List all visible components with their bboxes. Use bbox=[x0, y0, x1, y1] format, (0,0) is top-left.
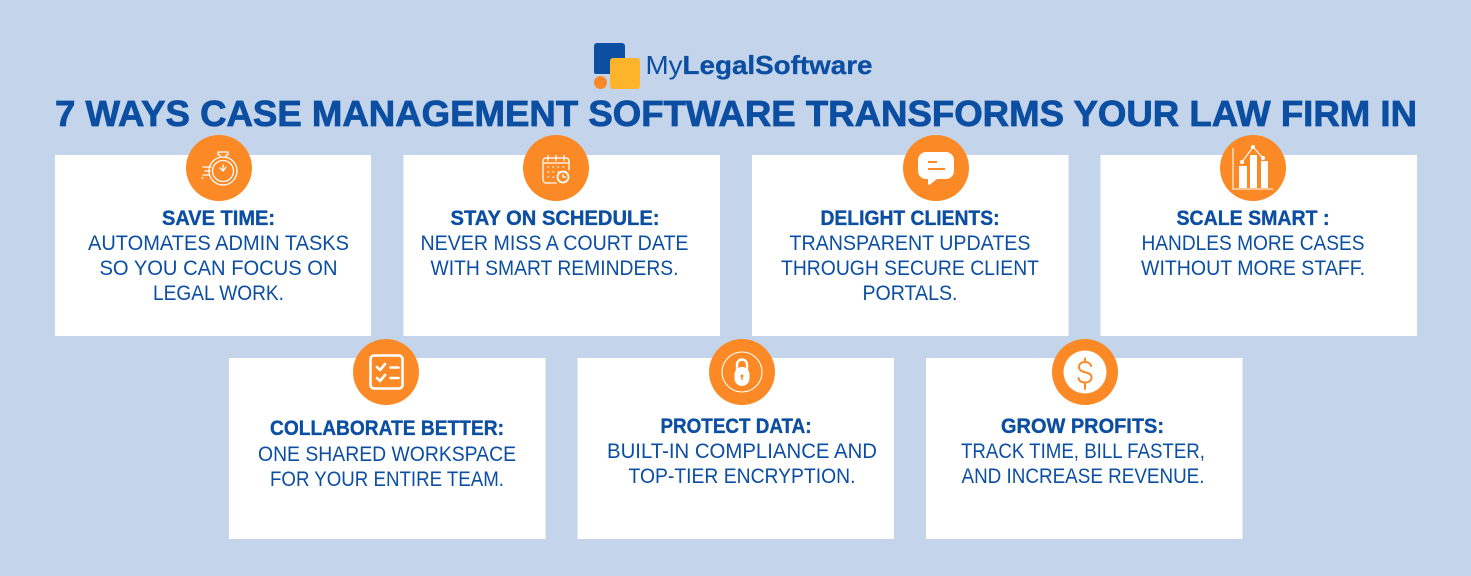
icon: stopwatch bbox=[186, 135, 252, 201]
body text bbox=[258, 443, 516, 491]
heading: PROTECT DATA: bbox=[660, 415, 812, 438]
body text: SO YOU CAN FOCUS ON bbox=[100, 257, 338, 280]
body text: WITHOUT MORE STAFF. bbox=[1141, 257, 1365, 280]
body text bbox=[420, 232, 688, 280]
heading: COLLABORATE BETTER: bbox=[270, 417, 504, 440]
icon: bar chart bbox=[1220, 135, 1286, 201]
heading: GROW PROFITS: bbox=[1001, 415, 1164, 438]
body text: AND INCREASE REVENUE. bbox=[962, 465, 1204, 488]
body text: THROUGH SECURE CLIENT bbox=[781, 257, 1039, 280]
panel: grow profits bbox=[926, 339, 1242, 539]
icon: padlock bbox=[709, 339, 775, 405]
body text bbox=[961, 440, 1205, 488]
logo: MyLegalSoftware bbox=[646, 50, 872, 80]
panel: collaborate better bbox=[229, 339, 546, 539]
heading: SCALE SMART : bbox=[1176, 207, 1330, 230]
body text: TRACK TIME, BILL FASTER, bbox=[961, 440, 1205, 463]
icon: dollar bbox=[1052, 339, 1118, 405]
panel: delight clients bbox=[752, 135, 1068, 336]
body text bbox=[607, 440, 877, 488]
body text bbox=[88, 232, 349, 305]
body text: WITH SMART REMINDERS. bbox=[430, 257, 678, 280]
panel: scale smart bbox=[1100, 135, 1417, 336]
body text: TOP-TIER ENCRYPTION. bbox=[628, 465, 856, 488]
heading: STAY ON SCHEDULE: bbox=[450, 207, 660, 230]
body text: TRANSPARENT UPDATES bbox=[790, 232, 1030, 255]
body text: NEVER MISS A COURT DATE bbox=[420, 232, 688, 255]
icon: chat bubble bbox=[903, 135, 969, 201]
icon: checklist bbox=[353, 339, 419, 405]
body text: BUILT-IN COMPLIANCE AND bbox=[607, 440, 877, 463]
body text bbox=[781, 232, 1039, 305]
logo bbox=[594, 43, 872, 89]
panel: protect data bbox=[578, 339, 894, 539]
body text: ONE SHARED WORKSPACE bbox=[258, 443, 516, 466]
title: 7 WAYS CASE MANAGEMENT SOFTWARE TRANSFORMS YOUR LAW FIRM IN bbox=[55, 93, 1417, 134]
body text bbox=[1141, 232, 1365, 280]
panel: save time bbox=[55, 135, 371, 336]
body text: FOR YOUR ENTIRE TEAM. bbox=[270, 468, 504, 491]
heading: DELIGHT CLIENTS: bbox=[820, 207, 1000, 230]
panel: stay on schedule bbox=[404, 135, 720, 336]
heading: SAVE TIME: bbox=[162, 207, 275, 230]
body text: PORTALS. bbox=[862, 282, 958, 305]
body text: HANDLES MORE CASES bbox=[1142, 232, 1364, 255]
body text: AUTOMATES ADMIN TASKS bbox=[88, 232, 349, 255]
icon: calendar bbox=[523, 135, 589, 201]
body text: LEGAL WORK. bbox=[153, 282, 284, 305]
